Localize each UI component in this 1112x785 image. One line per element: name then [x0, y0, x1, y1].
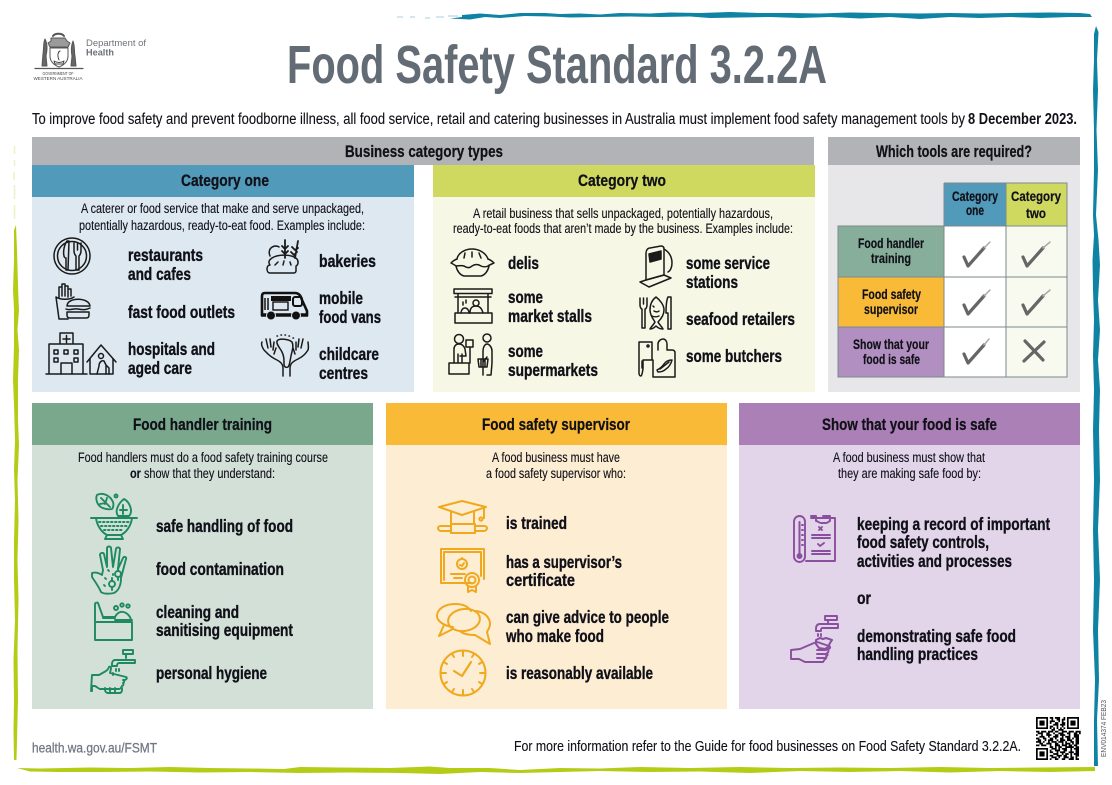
- label: keeping a record: [857, 514, 1050, 571]
- label: personal hygiene: personal hygiene: [156, 663, 267, 683]
- column header: category two: Category: [1011, 189, 1061, 204]
- department name: Department of: [86, 38, 146, 49]
- row label: show that your food is safe: Show that your: [853, 337, 930, 352]
- label: some supermarkets: some: [508, 341, 543, 361]
- label: some service stations: [686, 253, 770, 292]
- table: tools by category: [838, 183, 1067, 377]
- icon: pie: [451, 249, 494, 276]
- icon: thermometer and checklist: [794, 516, 835, 562]
- label: some service stations: stations: [686, 272, 738, 292]
- label: mobile food vans: mobile: [319, 288, 363, 308]
- panel: which tools are required: [828, 137, 1080, 392]
- label: restaurants and cafes: [128, 245, 203, 284]
- label: some market stalls: [508, 287, 592, 326]
- logo wordmark small: GOVERNMENT OF: [42, 71, 74, 77]
- government logo: WESTERN AUSTRALIA: [34, 76, 83, 82]
- label: childcare centres: [319, 344, 379, 383]
- heading: food safety supervisor: Food safety supervisor: [482, 415, 630, 434]
- title: Food Safety Standard 3.2.2A: [287, 35, 827, 95]
- document code: ENV014374 FEB23: [1101, 700, 1108, 757]
- icon: graduation cap: [438, 501, 487, 533]
- description: food safety supervisor: [486, 450, 626, 481]
- label: keeping a record: keeping a record of important: [857, 514, 1050, 534]
- label: demonstrating safe food handling: demonstrating safe food: [857, 626, 1016, 646]
- label: or: or: [857, 588, 871, 608]
- label: can give advice: can give advice to people: [506, 607, 669, 627]
- icon: fuel pump: [640, 246, 672, 287]
- description: food safety supervisor: A food business must have: [492, 450, 620, 465]
- icon: coat of arms: [35, 34, 83, 68]
- label: bakeries: bakeries: [319, 251, 376, 271]
- icon: supermarket checkout: [449, 334, 492, 375]
- icon: plate and cutlery: [54, 238, 90, 274]
- icon: food van: [261, 293, 308, 320]
- label: has a supervisor's certificate: has a supervisor’s: [506, 552, 622, 572]
- description: show that your food is safe: A food business must show that: [833, 450, 985, 465]
- icon: speech bubbles: [437, 604, 490, 644]
- panel: category two: [433, 165, 815, 392]
- icon: cleaver and board: [639, 339, 675, 377]
- description: category one: potentially hazardous, ready-to-eat food. Examples include:: [79, 218, 365, 233]
- label: hospitals and aged care: [128, 339, 215, 378]
- label: hospitals and aged care: aged care: [128, 358, 192, 378]
- row label: food safety supervisor: [862, 287, 921, 317]
- description: category two: ready-to-eat foods that aren’t made by the business. Examples include:: [453, 221, 793, 236]
- icon: colander with leaves: [91, 494, 137, 539]
- icon: clock: [440, 650, 486, 696]
- row label: food safety supervisor: supervisor: [864, 302, 919, 317]
- label: is trained: is trained: [506, 513, 567, 533]
- label: some market stalls: some: [508, 287, 543, 307]
- panel: business category types: [32, 137, 814, 165]
- QR code: [1036, 718, 1081, 759]
- label: delis: delis: [508, 253, 539, 273]
- label: food contamination: food contamination: [156, 559, 284, 579]
- label: restaurants and cafes: restaurants: [128, 245, 203, 265]
- heading: show that your food is safe: Show that your food is safe: [822, 415, 997, 434]
- ticks and cross: [964, 242, 1050, 363]
- label: is reasonably available: is reasonably available: [506, 663, 653, 683]
- label: some service stations: some service: [686, 253, 770, 273]
- label: seafood retailers: seafood retailers: [686, 309, 795, 329]
- heading: category one: Category one: [181, 171, 269, 190]
- column header: category one: one: [966, 203, 984, 218]
- icon: hand washing: [91, 650, 135, 693]
- label: safe handling of food: safe handling of food: [156, 516, 293, 536]
- label: cleaning and sanitising equipment: cleaning and: [156, 602, 239, 622]
- label: some supermarkets: [508, 341, 598, 380]
- label: mobile food vans: [319, 288, 381, 327]
- label: can give advice: [505, 607, 669, 646]
- label: mobile food vans: food vans: [319, 307, 381, 327]
- panel: food handler training: [32, 403, 373, 709]
- column header: category one: [952, 189, 998, 218]
- heading: business category types: Business category types: [345, 142, 503, 161]
- icon: market stall: [454, 289, 492, 323]
- label: cleaning and sanitising equipment: [156, 602, 293, 640]
- label: childcare centres: childcare: [319, 344, 379, 364]
- row label: food handler training: Food handler: [858, 236, 925, 251]
- label: some market stalls: market stalls: [508, 306, 592, 326]
- label: can give advice: who make food: [505, 626, 604, 646]
- column header: category one: Category: [952, 189, 998, 204]
- label: some butchers: some butchers: [686, 346, 782, 366]
- icon: hospital and aged care: [46, 333, 116, 374]
- description: category two: A retail business that sells unpackaged, potentially hazardous,: [473, 206, 773, 221]
- government logo: [34, 34, 146, 82]
- label: demonstrating safe food handling: [857, 626, 1016, 664]
- row label: food handler training: training: [871, 251, 911, 266]
- icon: washing food under tap: [791, 616, 838, 662]
- label: demonstrating safe food handling: handling practices: [857, 644, 978, 664]
- panel: food safety supervisor: [386, 403, 727, 709]
- government logo: Health: [86, 48, 114, 58]
- icon: burger and fries: [56, 284, 90, 319]
- column header: category two: two: [1026, 206, 1046, 221]
- icon: fish and cutlery: [640, 297, 671, 329]
- panel: show that your food is safe: [739, 403, 1080, 709]
- label: hospitals and aged care: hospitals and: [128, 339, 215, 359]
- description: category two: [453, 206, 793, 236]
- heading: category two: Category two: [578, 171, 666, 190]
- label: restaurants and cafes: and cafes: [128, 264, 191, 284]
- row label: show that your food is safe: food is safe: [863, 352, 920, 367]
- icon: bread and wheat: [267, 240, 298, 273]
- row label: food handler training: [858, 236, 925, 266]
- label: cleaning and sanitising equipment: sanitising equipment: [156, 620, 293, 640]
- row label: show that your food is safe: [853, 337, 930, 367]
- footer url: health.wa.gov.au/FSMT: [32, 740, 157, 756]
- column header: category two: [1011, 189, 1061, 221]
- label: keeping a record: food safety controls,: [857, 532, 989, 552]
- description: category one: [79, 201, 365, 233]
- description: food handler training: or show that they understand:: [130, 466, 275, 481]
- description: show that your food is safe: they are making safe food by:: [838, 466, 981, 481]
- footer note: For more information refer to the Guide for food businesses on Food Safety Standard 3.2.2A.: [514, 739, 1021, 755]
- label: childcare centres: centres: [319, 363, 368, 383]
- row label: food safety supervisor: Food safety: [862, 287, 921, 302]
- description: food safety supervisor: a food safety supervisor who:: [486, 466, 626, 481]
- label: has a supervisor's certificate: certificate: [506, 570, 575, 590]
- icon: hand with germs: [92, 546, 126, 594]
- icon: certificate: [441, 549, 484, 592]
- description: show that your food is safe: [833, 450, 985, 481]
- label: has a supervisor's certificate: [506, 552, 622, 590]
- description: category one: A caterer or food service that make and serve unpackaged,: [81, 201, 364, 216]
- label: some supermarkets: supermarkets: [508, 360, 598, 380]
- heading: food handler training: Food handler training: [133, 415, 272, 434]
- heading: which tools are required: Which tools are required?: [876, 142, 1032, 161]
- icon: hands and baby foot: [262, 335, 308, 376]
- description: food handler training: [78, 450, 328, 481]
- icon: cleaning equipment: [95, 603, 132, 640]
- panel: category one: [32, 165, 414, 392]
- label: keeping a record: activities and processes: [857, 551, 1012, 571]
- intro text: 8 December 2023.: [968, 111, 1077, 128]
- label: fast food outlets: fast food outlets: [128, 302, 235, 322]
- description: food handler training: Food handlers must do a food safety training course: [78, 450, 328, 465]
